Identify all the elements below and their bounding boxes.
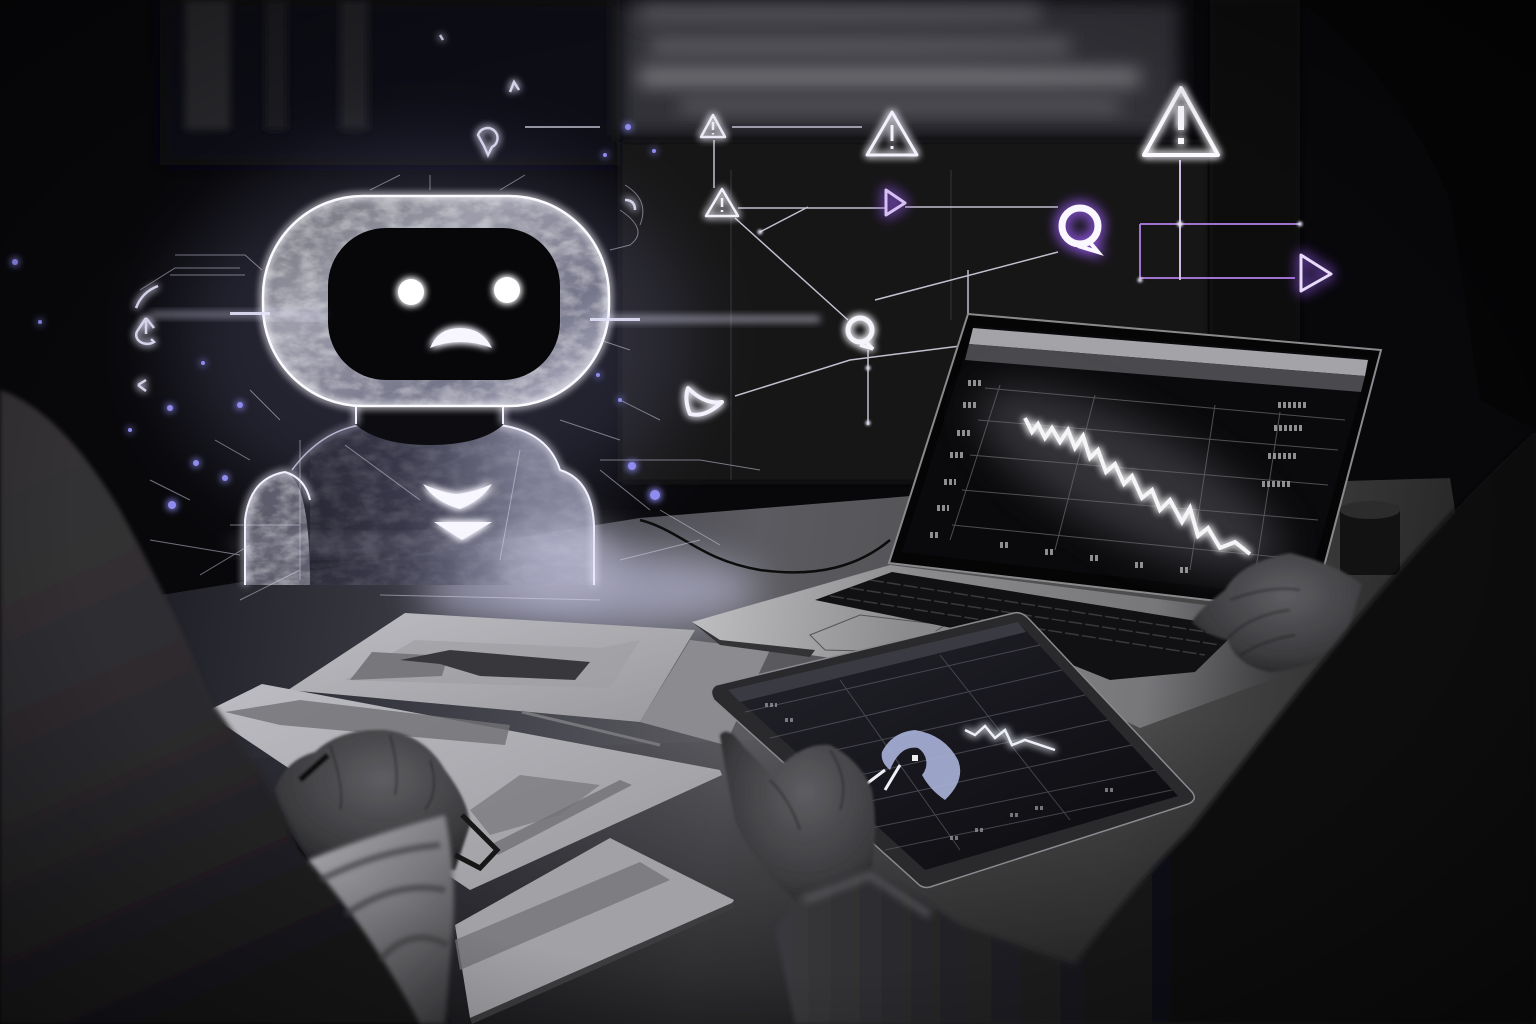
- icon: warning triangle medium: [867, 112, 917, 155]
- paper right: [640, 640, 770, 745]
- tablet display: [728, 622, 1178, 870]
- right arm: [775, 430, 1536, 1024]
- laptop base: [692, 565, 1308, 728]
- hologram scratches: [140, 175, 760, 600]
- node dots: [758, 221, 1302, 426]
- robot face screen: [328, 228, 560, 380]
- icon: bubble lower left: [686, 388, 722, 415]
- laptop: [692, 314, 1381, 728]
- robot head: [262, 195, 610, 407]
- cable: [640, 520, 890, 572]
- icon: warning triangle small: [701, 115, 725, 137]
- right hand on laptop: [1192, 553, 1362, 672]
- icon: play triangle center: [886, 190, 905, 215]
- icon: warning triangle left: [706, 189, 738, 216]
- left small icons: [136, 35, 635, 391]
- paper front: [455, 838, 734, 1018]
- tablet spark line: [965, 726, 1055, 750]
- left hand: [275, 730, 470, 870]
- particles: [12, 124, 660, 509]
- laptop screen bezel: [889, 314, 1381, 612]
- table hologram glow: [420, 550, 760, 630]
- paper middle: [205, 684, 722, 890]
- clip: [455, 815, 497, 868]
- laptop side labels: [930, 383, 1308, 570]
- icon: chat bubble purple: [1062, 208, 1098, 252]
- light streaks: [150, 312, 820, 550]
- left sleeve: [0, 390, 450, 1024]
- robot eyes: [398, 277, 520, 305]
- robot neck: [356, 400, 503, 445]
- icon: warning triangle large: [1144, 88, 1218, 155]
- robot hologram: [140, 150, 820, 600]
- laptop line chart: [1025, 418, 1250, 554]
- robot sad mouth: [430, 328, 492, 348]
- mug: [1340, 501, 1400, 575]
- right person: [720, 0, 1536, 1024]
- table: [130, 478, 1536, 1024]
- laptop display: [902, 326, 1370, 598]
- laptop grid: [950, 385, 1345, 575]
- laptop keyboard: [815, 572, 1240, 680]
- tablet labels: [765, 705, 1113, 838]
- connector lines: [525, 127, 1058, 425]
- right hand on tablet: [720, 732, 875, 905]
- tablet gauge chart: [865, 730, 960, 800]
- chest chevrons: [423, 484, 492, 540]
- paper back: [288, 613, 695, 722]
- icon: chat bubble center: [848, 318, 873, 349]
- icon: play triangle right: [1301, 255, 1331, 291]
- left cuff: [308, 815, 454, 1024]
- laptop trackpad: [810, 615, 945, 652]
- robot body: [245, 425, 620, 600]
- tablet: [711, 613, 1194, 887]
- papers: [205, 613, 770, 1024]
- left person: [0, 390, 497, 1024]
